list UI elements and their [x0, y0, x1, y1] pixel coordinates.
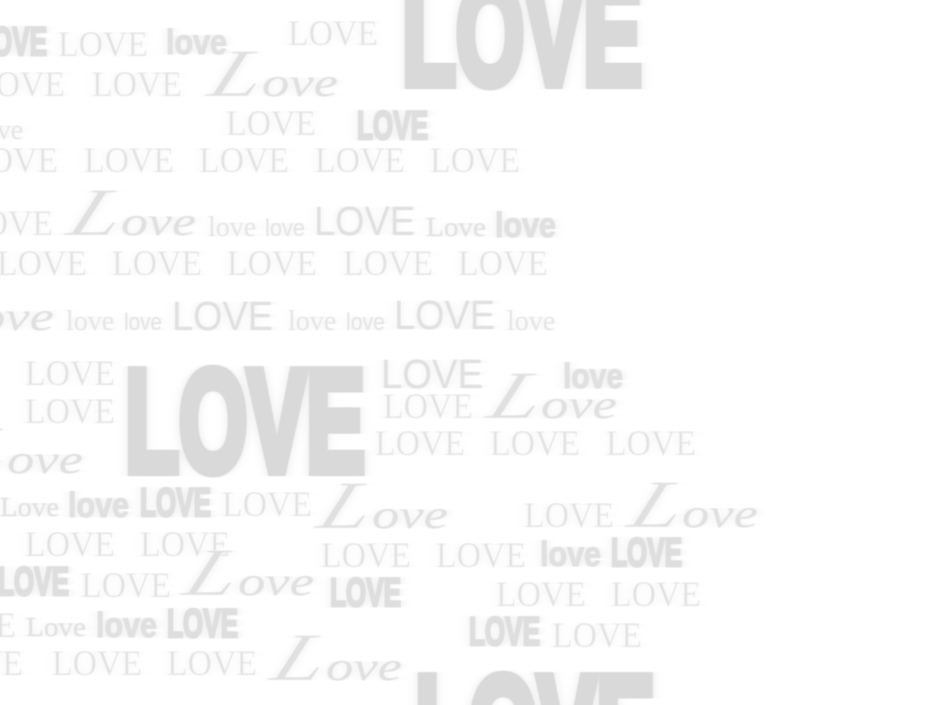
- middle cluster right words: LOVE: [606, 423, 696, 463]
- row 14 words: LOVE: [167, 643, 257, 683]
- row 5 words: LOVE: [314, 198, 415, 244]
- row 6 words: [0, 243, 548, 283]
- row 14 words: ove: [326, 644, 402, 689]
- row 4 words: LOVE: [315, 140, 405, 180]
- row 5 words: love: [495, 206, 556, 245]
- row 11 words: LOVE: [321, 535, 411, 575]
- row 5 words: love: [208, 212, 256, 243]
- row 2 words: LOVE: [92, 64, 182, 104]
- row 2 words: L: [198, 35, 281, 111]
- row 10 words: ove: [372, 492, 448, 537]
- row 1 words: [0, 13, 378, 64]
- row 7 words: love: [124, 309, 162, 336]
- row 11 words: LOVE: [436, 535, 526, 575]
- row 5 words: [0, 174, 556, 250]
- row 10 words: L: [618, 466, 701, 542]
- row 7 words: love: [288, 306, 336, 337]
- row 6 words: LOVE: [343, 243, 433, 283]
- row 12 words: L: [173, 534, 256, 610]
- row 11 words: [25, 524, 682, 575]
- row 3 words: LOVE: [357, 104, 428, 148]
- row 10 words: Love: [0, 492, 59, 522]
- row 11 words: love: [540, 535, 601, 574]
- middle cluster right words: LOVE: [490, 423, 580, 463]
- row 5 words: ove: [121, 199, 196, 244]
- row 11 words: LOVE: [140, 524, 230, 564]
- row 10 words: LOVE: [140, 481, 211, 525]
- row 10 words: love: [68, 486, 129, 525]
- row 6 words: LOVE: [112, 243, 202, 283]
- middle cluster right words: LOVE: [375, 423, 465, 463]
- row 7 words: LOVE: [172, 293, 273, 339]
- row 5 words: L: [57, 174, 140, 250]
- middle cluster left words: LOVE: [25, 391, 115, 431]
- row 7 words: love: [66, 306, 114, 337]
- row 12 words: LOVE: [81, 565, 171, 605]
- row 7 words: [0, 292, 555, 339]
- middle cluster right words: [375, 351, 696, 463]
- middle cluster right words: love: [563, 357, 623, 396]
- row 10 words: ove: [682, 491, 758, 536]
- middle cluster right words: L: [477, 357, 560, 433]
- row 2 words: ove: [262, 60, 338, 105]
- row 6 words: LOVE: [458, 243, 548, 283]
- row 13 words: [0, 602, 642, 655]
- middle cluster left words: [0, 353, 115, 488]
- row 7 words: LOVE: [394, 292, 495, 338]
- row 13 words: LOVE: [552, 615, 642, 655]
- row 12 words: LOVE: [496, 574, 586, 614]
- row 6 words: LOVE: [227, 243, 317, 283]
- row 4 words: LOVE: [199, 140, 289, 180]
- row 14 words: LOVE: [52, 643, 142, 683]
- row 4 words: LOVE: [84, 140, 174, 180]
- row 14 words: L: [261, 619, 344, 695]
- row 5 words: Love: [426, 212, 486, 242]
- row 7 words: love: [507, 306, 555, 337]
- row 2 words: [0, 35, 338, 111]
- row 1 words: LOVE: [58, 24, 148, 64]
- row 12 words: LOVE: [0, 560, 69, 604]
- row 13 words: LOVE: [469, 610, 540, 654]
- row 12 words: ove: [238, 559, 314, 604]
- row 3 words: LOVE: [226, 103, 316, 143]
- row 13 words: LOVE: [167, 602, 238, 646]
- middle cluster left words: LOVE: [25, 353, 115, 393]
- middle cluster right words: LOVE: [383, 386, 473, 426]
- row 10 words: LOVE: [222, 484, 312, 524]
- middle cluster right words: LOVE: [381, 351, 483, 397]
- row 13 words: Love: [26, 612, 86, 642]
- row 7 words: love: [346, 309, 385, 336]
- row 10 words: [0, 466, 758, 543]
- row 12 words: LOVE: [330, 571, 401, 615]
- row 5 words: love: [265, 215, 305, 242]
- large word: middle LOVE: LOVE: [125, 340, 365, 502]
- middle cluster right words: ove: [541, 382, 617, 427]
- row 4 words: [0, 140, 520, 180]
- row 12 words: [0, 534, 701, 615]
- middle cluster left words: ove: [7, 437, 83, 482]
- row 11 words: LOVE: [611, 531, 682, 575]
- row 10 words: LOVE: [524, 495, 614, 535]
- row 4 words: LOVE: [430, 140, 520, 180]
- row 11 words: LOVE: [25, 524, 115, 564]
- row 12 words: LOVE: [611, 574, 701, 614]
- row 14 words: [0, 619, 402, 695]
- row 10 words: L: [307, 467, 390, 543]
- row 13 words: love: [96, 606, 157, 645]
- row 1 words: love: [166, 23, 227, 62]
- row 1 words: LOVE: [288, 13, 378, 53]
- row 3 words: [0, 103, 428, 148]
